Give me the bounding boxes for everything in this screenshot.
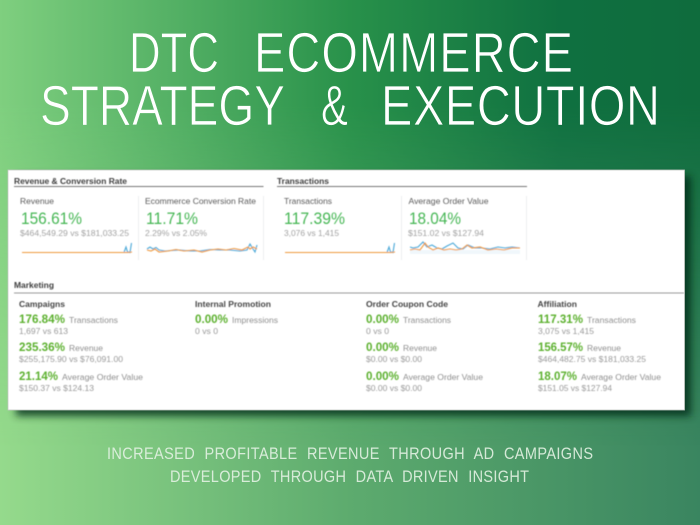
card: ecommerce conversion rate	[145, 196, 257, 252]
panel shadow	[16, 176, 691, 416]
sparkline: order value	[410, 242, 520, 254]
column: order coupon code: Order Coupon Code	[366, 300, 449, 309]
column: order coupon code	[366, 300, 483, 393]
column: campaigns: 1,697 vs 613	[19, 327, 69, 336]
card: average order value: $151.02 vs $127.94	[408, 228, 484, 238]
column: affiliation: $151.05 vs $127.94	[538, 384, 613, 393]
column: order coupon code: 0 vs 0	[366, 327, 390, 336]
column: campaigns: Campaigns	[19, 300, 66, 309]
column: campaigns: Revenue	[69, 343, 103, 353]
column: campaigns: Transactions	[69, 315, 118, 325]
column: affiliation: $464,482.75 vs $181,033.25	[538, 355, 647, 364]
card: transactions: Transactions	[284, 196, 332, 206]
caption: INCREASED PROFITABLE REVENUE THROUGH AD CAMPAIGNS	[107, 445, 593, 463]
card: average order value: Average Order Value	[408, 196, 489, 206]
column: internal promotion: 0.00%	[195, 314, 228, 326]
card: average order value: 18.04%	[409, 210, 461, 228]
column: order coupon code: $0.00 vs $0.00	[366, 355, 423, 364]
section: revenue and conversion rate: Revenue & Conversion Rate	[14, 177, 128, 186]
title: DTC	[129, 22, 219, 85]
column: affiliation: 156.57%	[538, 342, 583, 354]
card: transactions: 3,076 vs 1,415	[284, 228, 339, 238]
caption: DEVELOPED THROUGH DATA DRIVEN INSIGHT	[170, 468, 530, 486]
sparkline: transactions	[285, 243, 395, 252]
sparkline: conversion rate	[147, 244, 257, 252]
section: revenue and conversion rate	[14, 177, 264, 260]
card: revenue: Revenue	[20, 196, 54, 206]
card: transactions	[284, 196, 395, 252]
panel: analytics dashboard	[8, 170, 684, 410]
caption	[107, 445, 593, 486]
title	[40, 22, 660, 138]
column: internal promotion: Internal Promotion	[195, 300, 271, 309]
card: transactions: 117.39%	[284, 210, 345, 228]
column: internal promotion	[195, 300, 278, 336]
title: STRATEGY	[40, 75, 285, 138]
column: affiliation	[538, 300, 661, 393]
column: campaigns	[19, 300, 143, 393]
column: order coupon code: Transactions	[403, 315, 451, 325]
title: ECOMMERCE	[254, 22, 573, 85]
column: internal promotion: 0 vs 0	[195, 327, 219, 336]
card: ecommerce conversion rate: 2.29% vs 2.05%	[145, 228, 208, 238]
card: revenue: 156.61%	[21, 210, 82, 228]
column: internal promotion: Impressions	[232, 315, 278, 325]
column: campaigns: 21.14%	[19, 371, 58, 383]
column: affiliation: 117.31%	[538, 314, 583, 326]
column: campaigns: Average Order Value	[62, 372, 143, 382]
title: &	[321, 75, 348, 138]
column: campaigns: $150.37 vs $124.13	[19, 384, 95, 393]
column: order coupon code: 0.00%	[366, 342, 399, 354]
card: ecommerce conversion rate: Ecommerce Conversion Rate	[145, 196, 256, 206]
column: affiliation: Affiliation	[538, 300, 577, 309]
card: revenue	[20, 196, 132, 252]
column: order coupon code: 0.00%	[366, 371, 399, 383]
column: campaigns: 235.36%	[19, 342, 65, 354]
column: campaigns: 176.84%	[19, 314, 65, 326]
column: order coupon code: Average Order Value	[403, 372, 483, 382]
section: transactions: Transactions	[277, 177, 330, 186]
card: revenue: $464,549.29 vs $181,033.25	[20, 228, 129, 238]
column: order coupon code: Revenue	[403, 343, 437, 353]
column: order coupon code: 0.00%	[366, 314, 399, 326]
title: EXECUTION	[381, 75, 660, 138]
section: marketing: Marketing	[14, 281, 54, 290]
column: affiliation: Transactions	[587, 315, 636, 325]
column: affiliation: Average Order Value	[581, 372, 661, 382]
section: marketing	[14, 281, 684, 393]
section: transactions	[277, 177, 527, 260]
card: average order value	[408, 196, 520, 254]
card: ecommerce conversion rate: 11.71%	[146, 210, 198, 228]
column: affiliation: 3,075 vs 1,415	[538, 327, 595, 336]
column: campaigns: $255,175.90 vs $76,091.00	[19, 355, 124, 364]
column: affiliation: Revenue	[587, 343, 621, 353]
column: order coupon code: $0.00 vs $0.00	[366, 384, 423, 393]
sparkline: revenue	[22, 243, 132, 252]
column: affiliation: 18.07%	[538, 371, 577, 383]
